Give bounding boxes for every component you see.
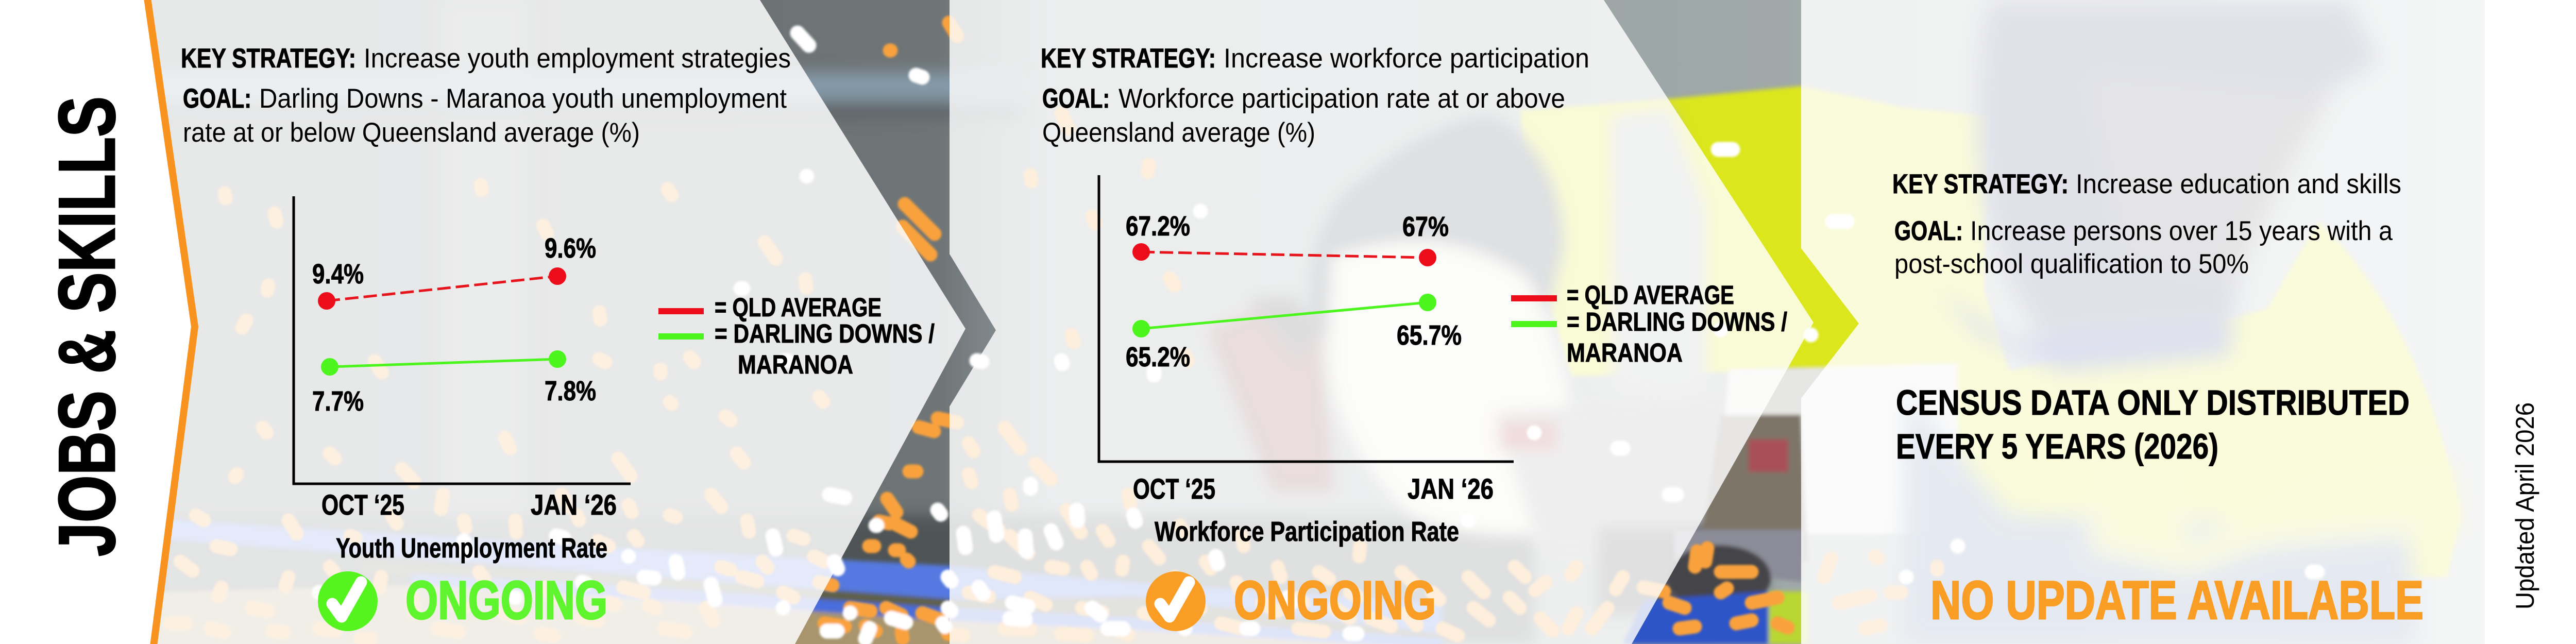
legend <box>658 293 935 379</box>
census note: EVERY 5 YEARS (2026) <box>1896 427 2218 466</box>
line chart: workforce participation: 65.2% <box>1126 342 1190 372</box>
right margin strip <box>2485 0 2576 644</box>
chart caption: Youth Unemployment Rate <box>336 533 607 564</box>
legend <box>1511 280 1787 367</box>
strategy and goal text: KEY STRATEGY: <box>1892 169 2069 199</box>
legend: = DARLING DOWNS / <box>1567 307 1787 336</box>
strategy and goal text: rate at or below Queensland average (%) <box>183 117 640 148</box>
updated date: Updated April 2026 <box>2511 402 2539 609</box>
line chart: youth unemployment: 7.7% <box>312 386 364 417</box>
status: ongoing green: ONGOING <box>405 570 607 631</box>
census note: CENSUS DATA ONLY DISTRIBUTED <box>1896 383 2410 422</box>
line chart: workforce participation: 67% <box>1402 211 1449 242</box>
spark particles: hot white <box>319 33 2317 639</box>
strategy and goal text: Increase workforce participation <box>1224 43 1589 74</box>
line chart: workforce participation: 65.7% <box>1397 320 1462 351</box>
legend: MARANOA <box>738 350 853 379</box>
strategy and goal text: Increase persons over 15 years with a <box>1970 216 2393 246</box>
strategy and goal text <box>1041 43 1589 148</box>
census note <box>1896 383 2410 466</box>
line chart: youth unemployment: OCT ‘25 <box>321 488 404 521</box>
strategy and goal text: KEY STRATEGY: <box>1041 43 1216 74</box>
icon: green check <box>318 571 378 631</box>
legend: = DARLING DOWNS / <box>715 319 935 348</box>
icon: orange check <box>1146 571 1206 631</box>
strategy and goal text: KEY STRATEGY: <box>181 43 356 74</box>
panel: education and skills <box>1892 169 2424 631</box>
strategy and goal text <box>181 43 791 148</box>
panel 3 chevron overlay <box>1801 0 2485 644</box>
panel 2 chevron overlay <box>950 0 1814 644</box>
strategy and goal text: Increase youth employment strategies <box>364 43 791 74</box>
strategy and goal text: Queensland average (%) <box>1042 117 1315 148</box>
chart caption: Workforce Participation Rate <box>1155 516 1459 547</box>
strategy and goal text: GOAL: <box>1894 216 1963 246</box>
legend: MARANOA <box>1567 338 1683 367</box>
spark particles: orange <box>170 23 1937 639</box>
strategy and goal text: Darling Downs - Maranoa youth unemployment <box>259 83 787 114</box>
line chart: workforce participation: OCT ‘25 <box>1133 472 1215 505</box>
line chart: workforce participation: JAN ‘26 <box>1408 472 1494 505</box>
panel: workforce participation <box>1041 43 1787 631</box>
strategy and goal text <box>1892 169 2401 279</box>
line chart: youth unemployment: 7.8% <box>545 376 596 406</box>
strategy and goal text: GOAL: <box>1042 83 1110 114</box>
strategy and goal text: Increase education and skills <box>2076 169 2401 199</box>
status: no update available: NO UPDATE AVAILABLE <box>1930 570 2424 631</box>
status: ongoing orange: ONGOING <box>1234 570 1436 631</box>
line chart: youth unemployment: 9.4% <box>312 259 364 290</box>
spark particles <box>170 23 2317 639</box>
line chart: workforce participation <box>1099 175 1514 505</box>
left title strip fill <box>0 0 195 644</box>
strategy and goal text: Workforce participation rate at or above <box>1118 83 1565 114</box>
strategy and goal text: post-school qualification to 50% <box>1894 249 2249 279</box>
line chart: workforce participation: 67.2% <box>1126 211 1190 242</box>
strategy and goal text: GOAL: <box>183 83 251 114</box>
line chart: youth unemployment <box>294 196 631 521</box>
panel 1 chevron overlay <box>147 0 965 644</box>
line chart: youth unemployment: 9.6% <box>545 233 596 264</box>
legend: = QLD AVERAGE <box>715 293 882 322</box>
line chart: youth unemployment: JAN ‘26 <box>531 488 617 521</box>
orange chevron divider line <box>147 0 195 644</box>
legend: = QLD AVERAGE <box>1567 280 1734 310</box>
panel: youth employment <box>181 43 935 631</box>
